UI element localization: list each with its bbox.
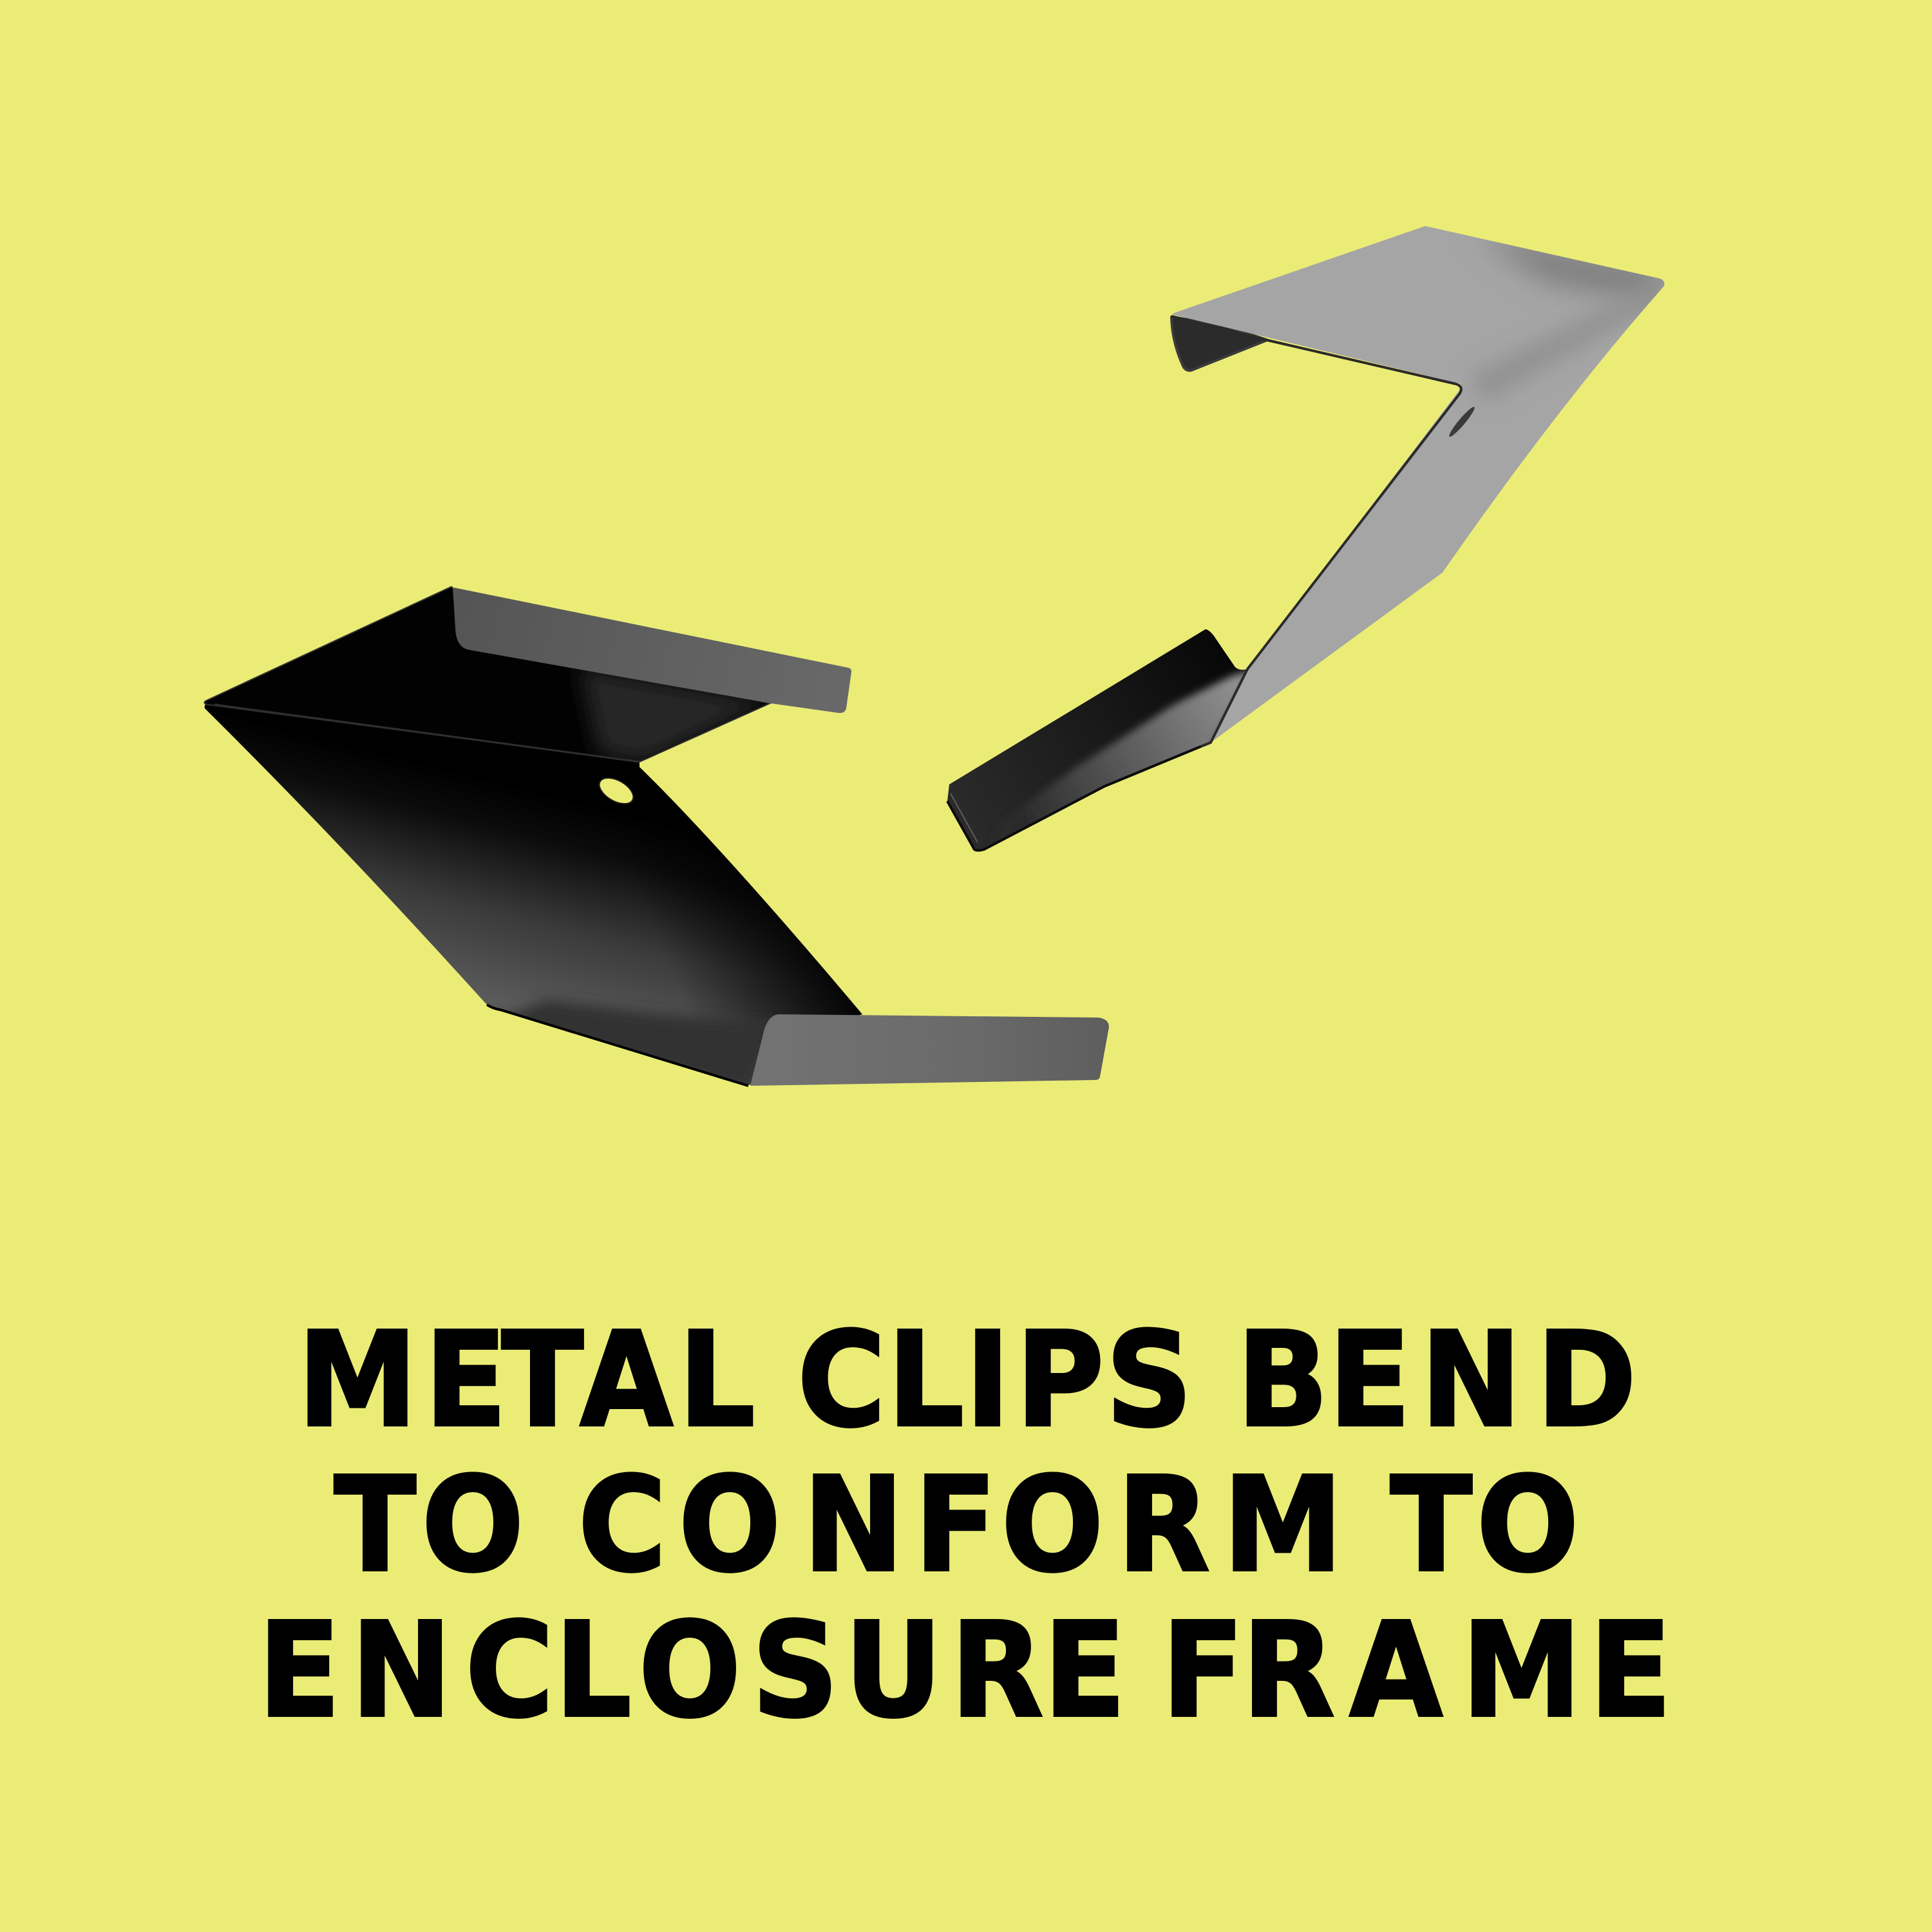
clip 2: inner bend edge [1171,316,1461,746]
illustration: black metal clip [204,587,1109,1095]
clip 1: bottom flange [750,1014,1109,1086]
clip 2: top edge and crease shading [1468,241,1664,398]
illustration: grey metal clip [947,226,1671,857]
headline [258,1304,1672,1747]
clip 2: left inner flange [1171,317,1267,370]
clip 1: lower edge line [487,1005,748,1086]
clip 1: lower plate with mounting hole [205,703,862,1095]
clip 2: top plate [1173,226,1664,384]
clip 1: mounting hole [595,773,638,809]
clip 2: mounting hole [1447,405,1477,439]
clip 1: top flange [453,587,851,713]
clip 1: upper inner face [204,587,773,763]
headline line 2: TO CONFORM TO [334,1449,1579,1601]
headline line 3: ENCLOSURE FRAME [258,1595,1672,1747]
headline line 1: METAL CLIPS BEND [298,1304,1636,1456]
clip 2: lower inner flange [947,629,1253,857]
clip 2: middle plate [1211,286,1664,743]
clip 1: crease line [214,705,639,762]
